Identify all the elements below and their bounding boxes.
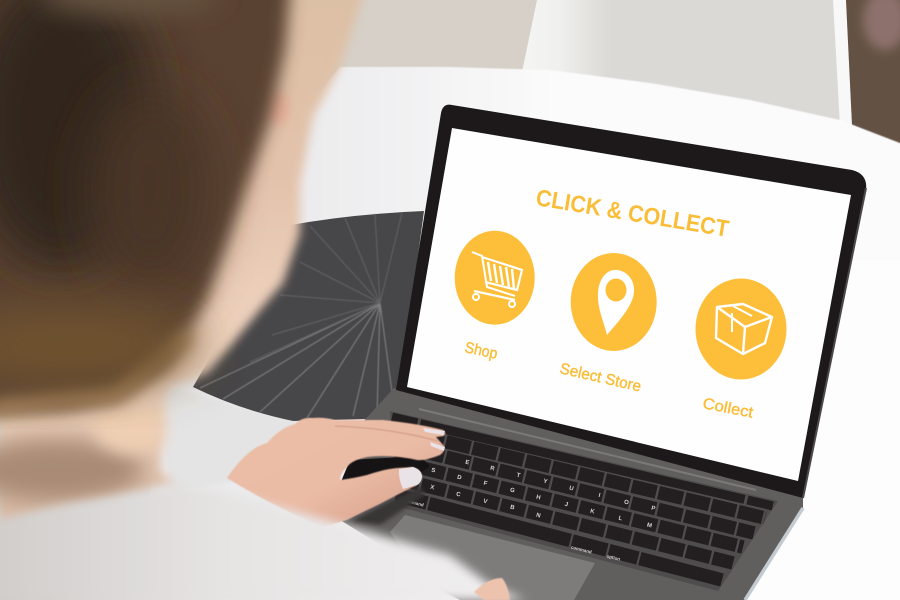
key labels: M	[646, 523, 652, 530]
title: Click and Collect: CLICK & COLLECT	[534, 184, 731, 242]
key labels: N	[535, 513, 541, 519]
key labels: J	[564, 502, 569, 508]
key labels: T	[516, 473, 521, 479]
skin tones	[266, 91, 290, 125]
keyboard	[390, 411, 778, 591]
background chair	[522, 0, 852, 126]
icon: shopping cart	[455, 231, 535, 325]
icon: map pin	[571, 253, 657, 351]
key labels: R	[489, 466, 496, 473]
white table	[150, 67, 900, 600]
key labels: C	[455, 492, 462, 499]
label: shop: Shop	[463, 339, 499, 363]
key labels: L	[618, 516, 623, 522]
key labels: O	[623, 500, 630, 507]
label: collect: Collect	[701, 395, 755, 422]
screen	[407, 128, 851, 481]
dark placemat	[193, 211, 424, 421]
hair	[0, 0, 292, 415]
white shirt	[0, 485, 525, 600]
fingernails	[399, 428, 445, 489]
key labels	[402, 460, 656, 562]
key labels: K	[589, 509, 596, 516]
background corner	[846, 0, 900, 146]
key labels: H	[535, 495, 541, 501]
step: collect	[696, 278, 786, 422]
laptop base	[340, 388, 803, 600]
key labels: command	[570, 545, 593, 555]
key labels: D	[456, 475, 463, 482]
step: select store	[558, 253, 657, 396]
key labels: I	[598, 493, 601, 499]
laptop	[340, 105, 866, 600]
screen bezel	[396, 105, 866, 498]
key labels: S	[431, 468, 436, 474]
hinge strip	[419, 409, 756, 490]
key labels: command	[402, 498, 425, 508]
key labels: P	[651, 506, 656, 512]
trackpad	[390, 515, 595, 600]
key labels: V	[483, 499, 488, 505]
hand on keyboard	[227, 418, 445, 527]
neck and skin	[0, 0, 365, 525]
key labels: U	[568, 486, 574, 492]
step: shop	[455, 231, 535, 363]
key labels: X	[430, 485, 435, 491]
label: select store: Select Store	[558, 360, 643, 396]
key labels: option	[606, 553, 621, 562]
laptop silver edge	[745, 508, 803, 600]
key labels: G	[509, 488, 516, 495]
key labels: B	[509, 505, 516, 512]
key labels: Y	[543, 479, 548, 485]
fingertip over sleeve	[474, 578, 510, 600]
icon: parcel box	[696, 278, 786, 380]
key labels: E	[465, 460, 470, 466]
key labels: F	[483, 481, 488, 487]
